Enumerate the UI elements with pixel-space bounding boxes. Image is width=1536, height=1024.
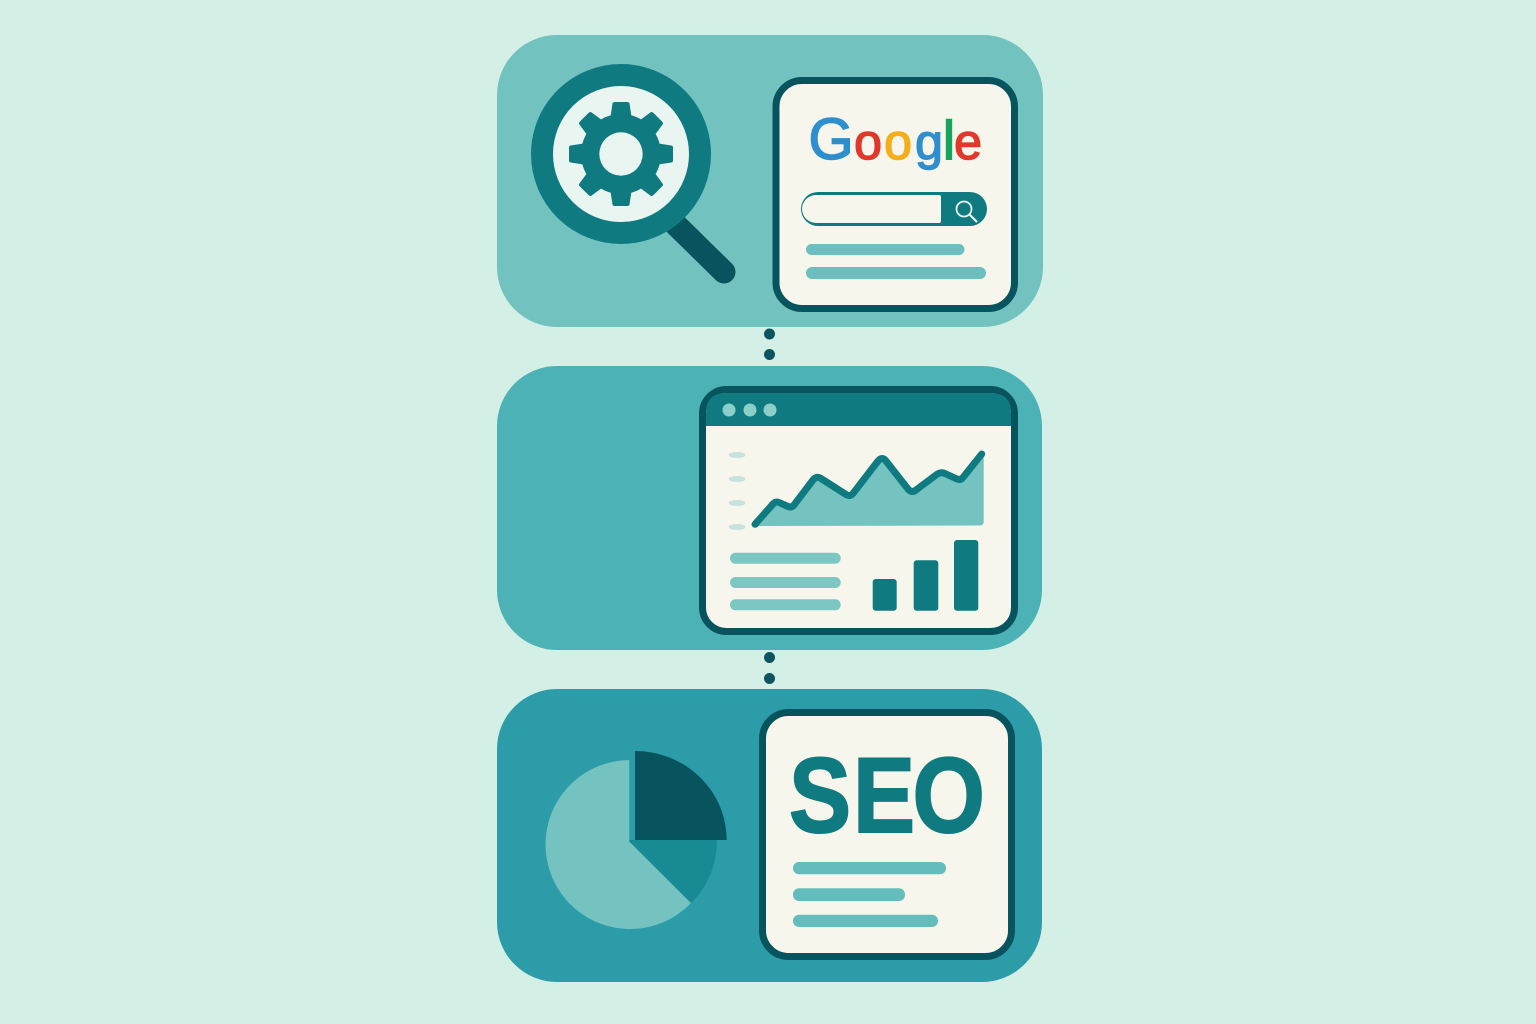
panel: analytics <box>497 366 1042 650</box>
card frame <box>776 80 1014 308</box>
card: analytics browser window <box>702 390 1014 632</box>
icon: gear <box>569 102 673 206</box>
pie chart <box>546 751 727 929</box>
card: Google search <box>776 80 1014 308</box>
panel: SEO <box>497 689 1042 982</box>
pie slice: medium <box>629 840 717 903</box>
Google logo: e <box>954 114 982 170</box>
magnifier ring <box>542 75 700 233</box>
window controls <box>722 404 776 416</box>
window title bar <box>706 393 1011 426</box>
pie slice: large <box>546 760 691 929</box>
connector dots: search to analytics <box>764 328 775 360</box>
bar chart <box>873 540 978 611</box>
panel background: SEO <box>497 689 1042 982</box>
panel background: search <box>497 35 1043 327</box>
text lines <box>730 553 841 610</box>
area chart <box>755 454 984 526</box>
Google logo: o <box>854 114 882 170</box>
Google logo: G <box>808 107 854 172</box>
window frame <box>702 390 1014 632</box>
SEO heading: SEO <box>789 736 985 855</box>
Google logo: l <box>943 109 955 171</box>
search bar <box>801 192 987 226</box>
chart axis ticks <box>728 452 746 530</box>
icon: magnifier with gear <box>542 75 724 272</box>
card: SEO document <box>762 712 1012 956</box>
panel background: analytics <box>497 366 1042 650</box>
text lines <box>793 862 946 927</box>
card frame <box>762 712 1012 956</box>
Google logo: o <box>884 114 912 170</box>
Google logo: g <box>915 114 943 170</box>
magnifier handle <box>668 217 724 272</box>
pie slice: dark <box>635 751 727 840</box>
icon: search glass <box>956 202 976 222</box>
result lines <box>806 244 986 279</box>
panel: search <box>497 35 1043 327</box>
connector dots: analytics to SEO <box>764 652 775 684</box>
